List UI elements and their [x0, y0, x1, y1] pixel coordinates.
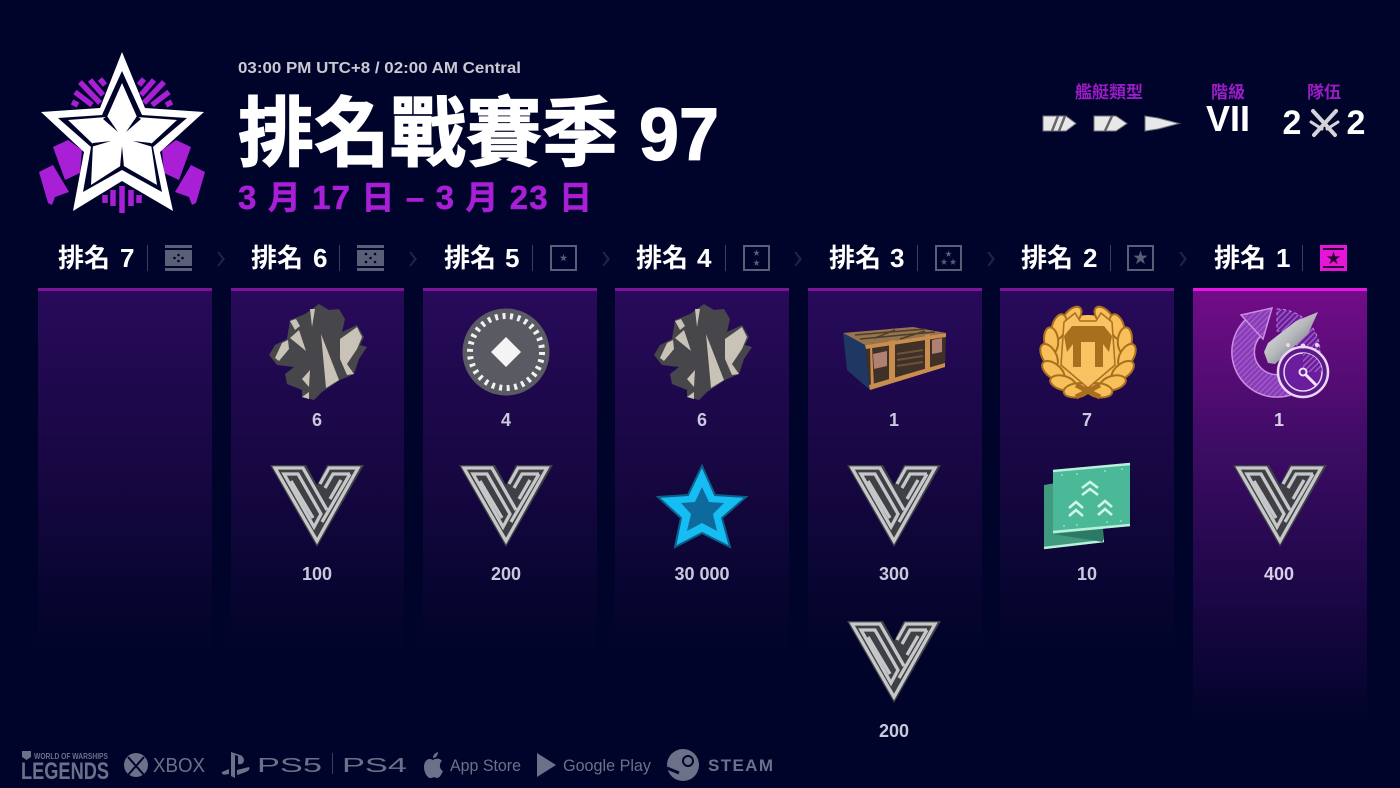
rank 7 header — [58, 243, 192, 273]
arrow — [409, 252, 417, 266]
count: 6 — [312, 410, 322, 430]
count: 10 — [1077, 564, 1097, 584]
icon: supply crate — [843, 327, 946, 390]
count: 200 — [879, 721, 909, 741]
rank 2 header — [1021, 243, 1153, 273]
logo: PS5 — [222, 752, 322, 778]
count: 1 — [1274, 410, 1284, 430]
icon: ship type 3 — [1145, 116, 1179, 131]
logo: Google Play: Google Play — [563, 756, 651, 775]
rank 6 header: 排名 — [251, 243, 303, 273]
footer: platform logos — [21, 749, 773, 785]
icon: blue star — [658, 466, 746, 547]
icon: reload booster — [1241, 308, 1328, 397]
icon: rank token — [847, 621, 941, 703]
battle info: ship types, tier, team — [1043, 82, 1365, 142]
icon: rank token — [459, 465, 553, 547]
icon: camouflage — [654, 304, 752, 400]
logo: World of Warships Legends: WORLD OF WARSHIPS — [34, 752, 109, 761]
count: 4 — [501, 410, 511, 430]
heading: team: 隊伍 — [1307, 83, 1341, 102]
rank 4 header: 排名 — [636, 243, 688, 273]
panel: rank 7 — [38, 288, 212, 651]
date range: 3 月 17 日 – 3 月 23 日 — [238, 179, 592, 216]
tier value: VII — [1206, 98, 1250, 139]
rank 3 header: 排名 — [829, 243, 881, 273]
arrow — [1179, 252, 1187, 266]
logo: Steam — [667, 749, 773, 781]
count: 7 — [1082, 410, 1092, 430]
rank 5 header: 排名 — [444, 243, 496, 273]
count: 400 — [1264, 564, 1294, 584]
icon: rank token — [847, 465, 941, 547]
icon: rank token — [270, 465, 364, 547]
heading: tier: 階級 — [1211, 82, 1245, 102]
icon: crossed swords — [1311, 111, 1338, 135]
rank 3 header — [829, 243, 961, 273]
rank 4 header: 4 — [697, 243, 712, 273]
rank 1 header: 排名 — [1214, 243, 1266, 273]
count: 1 — [889, 410, 899, 430]
icon: camouflage — [269, 304, 367, 400]
team size right: 2 — [1347, 104, 1365, 142]
logo: World of Warships Legends: LEGENDS — [21, 758, 109, 785]
panel: rank 4 — [615, 288, 789, 651]
team size left: 2 — [1283, 104, 1301, 142]
icon: signal coin — [462, 308, 550, 396]
title: 排名戰賽季 — [238, 92, 618, 177]
logo: PS5: PS5 — [257, 755, 322, 777]
rank 5 header — [444, 243, 576, 273]
divider — [332, 753, 333, 774]
rank 6 header: 6 — [313, 243, 327, 273]
count: 100 — [302, 564, 332, 584]
rank 2 header: 2 — [1083, 243, 1097, 273]
logo: Steam: STEAM — [708, 756, 773, 775]
arrow — [602, 252, 610, 266]
rank 3 header: 3 — [890, 243, 904, 273]
icon: ship type 1 — [1043, 116, 1076, 131]
rank 7 header: 排名 — [58, 243, 110, 273]
count: 300 — [879, 564, 909, 584]
icon: gold laurel shield — [1035, 301, 1141, 406]
rank 1 header: 1 — [1276, 243, 1290, 273]
rank 4 header — [636, 243, 769, 273]
logo: World of Warships Legends — [21, 751, 109, 785]
panel: rank 2 — [1000, 288, 1174, 651]
icon: green flags — [1044, 463, 1130, 549]
rank 2 header: 排名 — [1021, 243, 1073, 273]
logo: ranked battle star emblem — [39, 52, 205, 213]
count: 200 — [491, 564, 521, 584]
count: 6 — [697, 410, 707, 430]
rank 1 header — [1214, 243, 1347, 273]
rank 7 header: 7 — [120, 243, 134, 273]
panel: rank 6 — [231, 288, 404, 651]
panel: rank 5 — [423, 288, 597, 651]
rank 5 header: 5 — [505, 243, 519, 273]
heading: ship types: 艦艇類型 — [1075, 83, 1143, 102]
icon: ship type 2 — [1094, 116, 1127, 131]
logo: Xbox: XBOX — [153, 755, 205, 777]
logo: Google Play — [537, 753, 651, 777]
time text: 03:00 PM UTC+8 / 02:00 AM Central — [238, 60, 521, 77]
arrow — [217, 252, 225, 266]
icon: rank token — [1233, 465, 1327, 547]
logo: App Store — [424, 752, 521, 778]
rank 6 header — [251, 243, 384, 273]
logo: App Store: App Store — [450, 756, 521, 775]
logo: PS4: PS4 — [342, 755, 407, 777]
count: 30 000 — [674, 564, 730, 584]
arrow — [987, 252, 995, 266]
panel: rank 1 — [1193, 288, 1367, 721]
logo: Xbox — [124, 753, 205, 777]
arrow — [794, 252, 802, 266]
panel: rank 3 — [808, 288, 982, 741]
title: 97 — [639, 93, 719, 176]
